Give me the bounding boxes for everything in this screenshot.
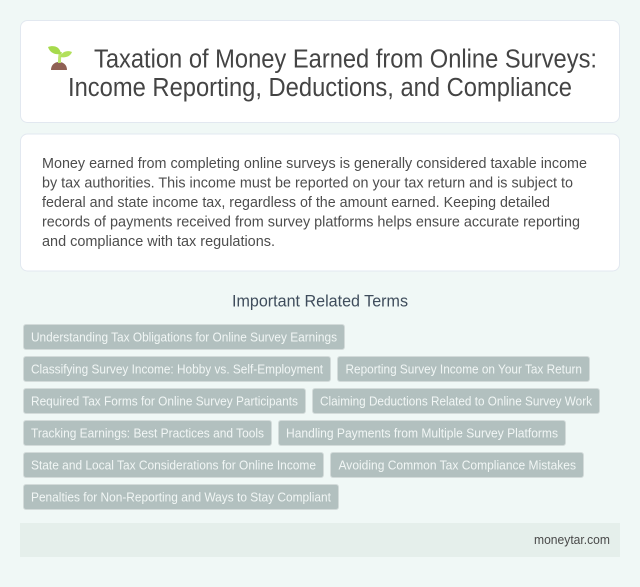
tag: Handling Payments from Multiple Survey Platforms [286, 426, 558, 440]
description text: and compliance with tax regulations. [42, 233, 275, 250]
title [68, 46, 597, 102]
tag: State and Local Tax Considerations for Online Income [31, 458, 316, 472]
description text [42, 155, 587, 250]
footer bar [20, 523, 620, 557]
tag [24, 484, 338, 510]
panel: title card [20, 20, 620, 122]
description text: records of payments received from survey platforms helps ensure accurate reporting [42, 214, 580, 230]
tag: Claiming Deductions Related to Online Survey Work [320, 394, 592, 408]
tag: Classifying Survey Income: Hobby vs. Self-Employment [31, 362, 323, 376]
tag [330, 452, 584, 478]
tag [24, 452, 324, 478]
tag: Understanding Tax Obligations for Online Survey Earnings [31, 330, 337, 344]
tag [24, 388, 306, 414]
tag [338, 356, 590, 382]
tag [312, 388, 600, 414]
panel: description card [20, 134, 620, 271]
title: Taxation of Money Earned from Online Surveys: [94, 46, 597, 74]
tag [24, 356, 330, 382]
tag: Penalties for Non-Reporting and Ways to Stay Compliant [31, 490, 331, 504]
footer source text: moneytar.com [534, 533, 610, 547]
heading: important related terms: Important Related Terms [232, 292, 408, 310]
tag: Tracking Earnings: Best Practices and Tools [31, 426, 264, 440]
description text: Money earned from completing online surveys is generally considered taxable income [42, 155, 587, 172]
tag [24, 420, 272, 446]
tag: Avoiding Common Tax Compliance Mistakes [338, 458, 576, 472]
description text: by tax authorities. This income must be reported on your tax return and is subject to [42, 174, 573, 192]
icon: sprout [48, 46, 72, 70]
tag: Reporting Survey Income on Your Tax Return [346, 362, 582, 376]
tag list [24, 324, 600, 510]
tag [278, 420, 566, 446]
title: Income Reporting, Deductions, and Compliance [68, 74, 572, 102]
description text: federal and state income tax, regardless of the amount earned. Keeping detailed [42, 194, 550, 211]
tag [24, 324, 344, 350]
tag: Required Tax Forms for Online Survey Participants [31, 394, 298, 408]
